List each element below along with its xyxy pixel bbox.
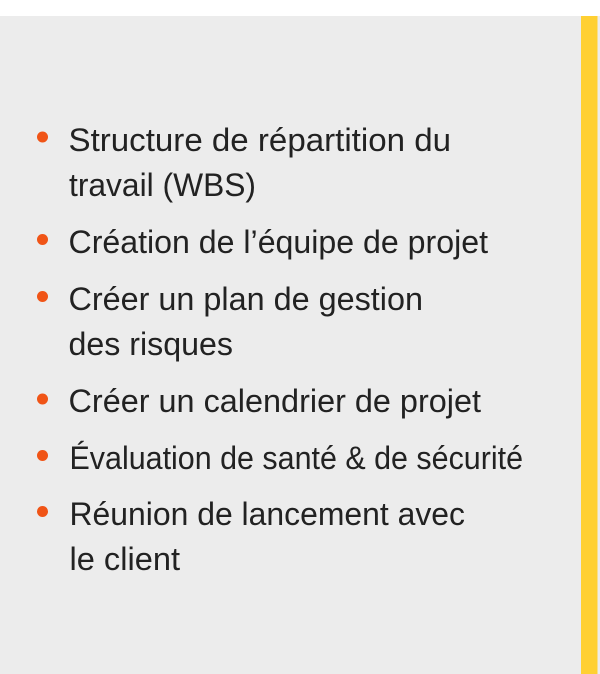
- list item: risk management plan: [37, 281, 423, 362]
- list item: client kickoff meeting: le client: [70, 541, 180, 577]
- list item: health and safety assessment: Évaluation de santé & de sécurité: [70, 440, 523, 476]
- list item: client kickoff meeting: [37, 496, 465, 577]
- list item: work breakdown structure: [37, 122, 451, 203]
- list item: project calendar: Créer un calendrier de projet: [68, 383, 481, 419]
- list item: project team creation: Création de l’équipe de projet: [68, 224, 488, 260]
- list item: work breakdown structure: Structure de répartition du: [68, 122, 451, 158]
- list item: risk management plan: Créer un plan de gestion: [68, 281, 423, 317]
- list item: client kickoff meeting: Réunion de lancement avec: [70, 496, 465, 532]
- list item: risk management plan: des risques: [68, 326, 233, 362]
- accent: yellow vertical bar: [581, 16, 598, 674]
- list item: work breakdown structure: travail (WBS): [69, 167, 256, 203]
